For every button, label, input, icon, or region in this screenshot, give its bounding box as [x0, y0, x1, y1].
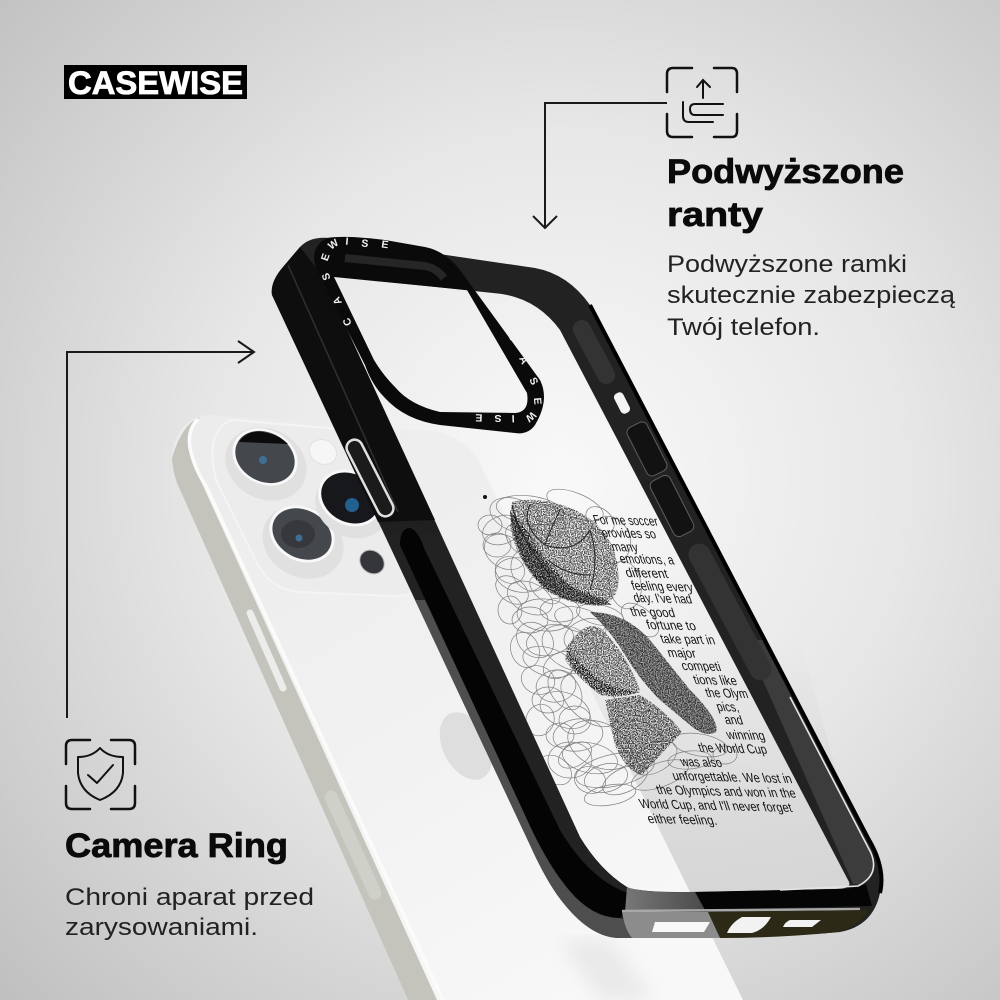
left black slot	[400, 528, 629, 918]
soccer quote text: day. I've had	[631, 590, 694, 606]
ink dot	[483, 495, 487, 499]
doodle artwork	[478, 483, 737, 809]
sensor	[355, 545, 389, 579]
lower lighter pill	[685, 540, 775, 684]
ball	[510, 500, 619, 606]
ring lettering: S	[494, 412, 502, 424]
arrow: to camera ring	[67, 341, 254, 718]
soccer quote text: take part in	[658, 631, 717, 647]
bottom light bands	[560, 940, 655, 1000]
soccer quote text: the World Cup	[696, 740, 769, 757]
soccer quote text: major	[665, 645, 698, 661]
soccer quote text: different	[623, 565, 670, 581]
port speaker left	[652, 922, 710, 932]
ring lettering: E	[531, 397, 543, 405]
apple logo	[429, 703, 503, 789]
port hole	[613, 391, 631, 415]
soccer quote text: either feeling.	[645, 811, 719, 828]
heading: camera ring: Camera Ring	[65, 827, 288, 865]
soccer quote text: provides so	[599, 525, 658, 541]
left outer strip	[415, 600, 640, 938]
silver side button	[344, 437, 396, 519]
bottom face grey	[622, 912, 720, 938]
phone	[172, 413, 743, 1000]
soccer quote text: pics,	[714, 699, 741, 715]
lens 2	[249, 491, 357, 593]
port speaker right	[783, 920, 821, 927]
arrow: to raised edges	[533, 103, 667, 228]
ring lettering: E	[475, 411, 483, 423]
text: camera ring description: Chroni aparat przed	[65, 884, 314, 911]
soccer quote text: the Olympics and won in the	[654, 782, 798, 801]
bottom face olive	[708, 910, 868, 938]
bottom rim highlight	[622, 909, 860, 911]
soccer quote text: For me soccer	[591, 512, 660, 529]
ring lettering: I	[345, 236, 349, 248]
soccer quote text: unforgettable. We lost in	[670, 768, 794, 786]
right outer dark line	[590, 305, 882, 893]
upper lighter pill	[570, 317, 618, 387]
soccer quote text: was also	[677, 754, 724, 770]
soccer quote text: competi	[679, 658, 723, 674]
camera ring	[314, 236, 544, 433]
ring lettering: S	[320, 271, 333, 282]
port usb	[727, 917, 771, 933]
text: raised edges description: skutecznie zabezpieczą	[667, 282, 956, 309]
side button one	[625, 420, 669, 478]
ring lettering: A	[330, 294, 345, 307]
text: raised edges description: Twój telefon.	[667, 314, 820, 341]
phone side button lower	[331, 797, 375, 893]
soccer quote text: tions like	[691, 672, 739, 688]
scribble loops	[478, 483, 737, 809]
hands and sleeve	[565, 612, 716, 775]
icon: shield	[66, 740, 135, 809]
text: raised edges description	[667, 251, 956, 341]
soccer quote text	[591, 512, 798, 828]
lens 3	[303, 459, 401, 551]
ring lettering: E	[319, 252, 333, 263]
icon: raised edges	[667, 68, 737, 137]
phone body	[172, 415, 743, 1000]
text: camera ring description: zarysowaniami.	[65, 914, 258, 941]
soccer quote text: feeling every	[629, 578, 695, 595]
side button two	[648, 473, 696, 539]
ring lettering: S	[526, 376, 540, 387]
ring lettering: S	[361, 237, 369, 250]
soccer quote text: and	[722, 712, 745, 727]
soccer quote text: many	[609, 539, 640, 555]
ring body	[314, 237, 544, 433]
ring wall highlight	[345, 258, 444, 278]
lower window shade	[566, 640, 870, 892]
ring lettering: W	[523, 409, 538, 424]
bottom band dark	[690, 884, 872, 910]
ring lettering: C	[505, 331, 520, 344]
ring lettering: C	[340, 315, 355, 328]
logo: CASEWISE	[68, 65, 243, 101]
soccer quote text: the good	[628, 604, 677, 620]
ring lettering: I	[511, 412, 515, 424]
bottom band translucent	[625, 887, 705, 912]
case frame	[272, 238, 882, 938]
phone side button upper	[250, 613, 283, 688]
ring lettering: A	[516, 354, 531, 367]
text: raised edges description: Podwyższone ramki	[667, 251, 907, 278]
text: camera ring description	[65, 884, 314, 941]
ring lettering	[319, 236, 543, 424]
flash	[305, 435, 341, 469]
ring lettering: E	[381, 238, 389, 251]
soccer quote text: World Cup, and I'll never forget	[637, 796, 794, 815]
soccer quote text: emotions, a	[617, 551, 676, 567]
lens 1	[212, 413, 320, 515]
soccer quote text: winning	[723, 727, 767, 743]
lower right light line	[780, 697, 874, 890]
upper left solid band	[272, 247, 435, 522]
heading second line: ranty	[667, 196, 763, 234]
soccer quote text: fortune to	[644, 617, 698, 633]
lower right grey strip	[745, 640, 874, 885]
heading: raised edges: Podwyższone	[667, 153, 904, 191]
ring lettering: W	[326, 237, 341, 252]
camera plateau	[212, 420, 412, 596]
soccer quote text: the Olym	[703, 685, 750, 701]
upper left band fade	[378, 520, 445, 542]
phone case	[272, 238, 882, 938]
phone side face	[172, 417, 437, 1000]
